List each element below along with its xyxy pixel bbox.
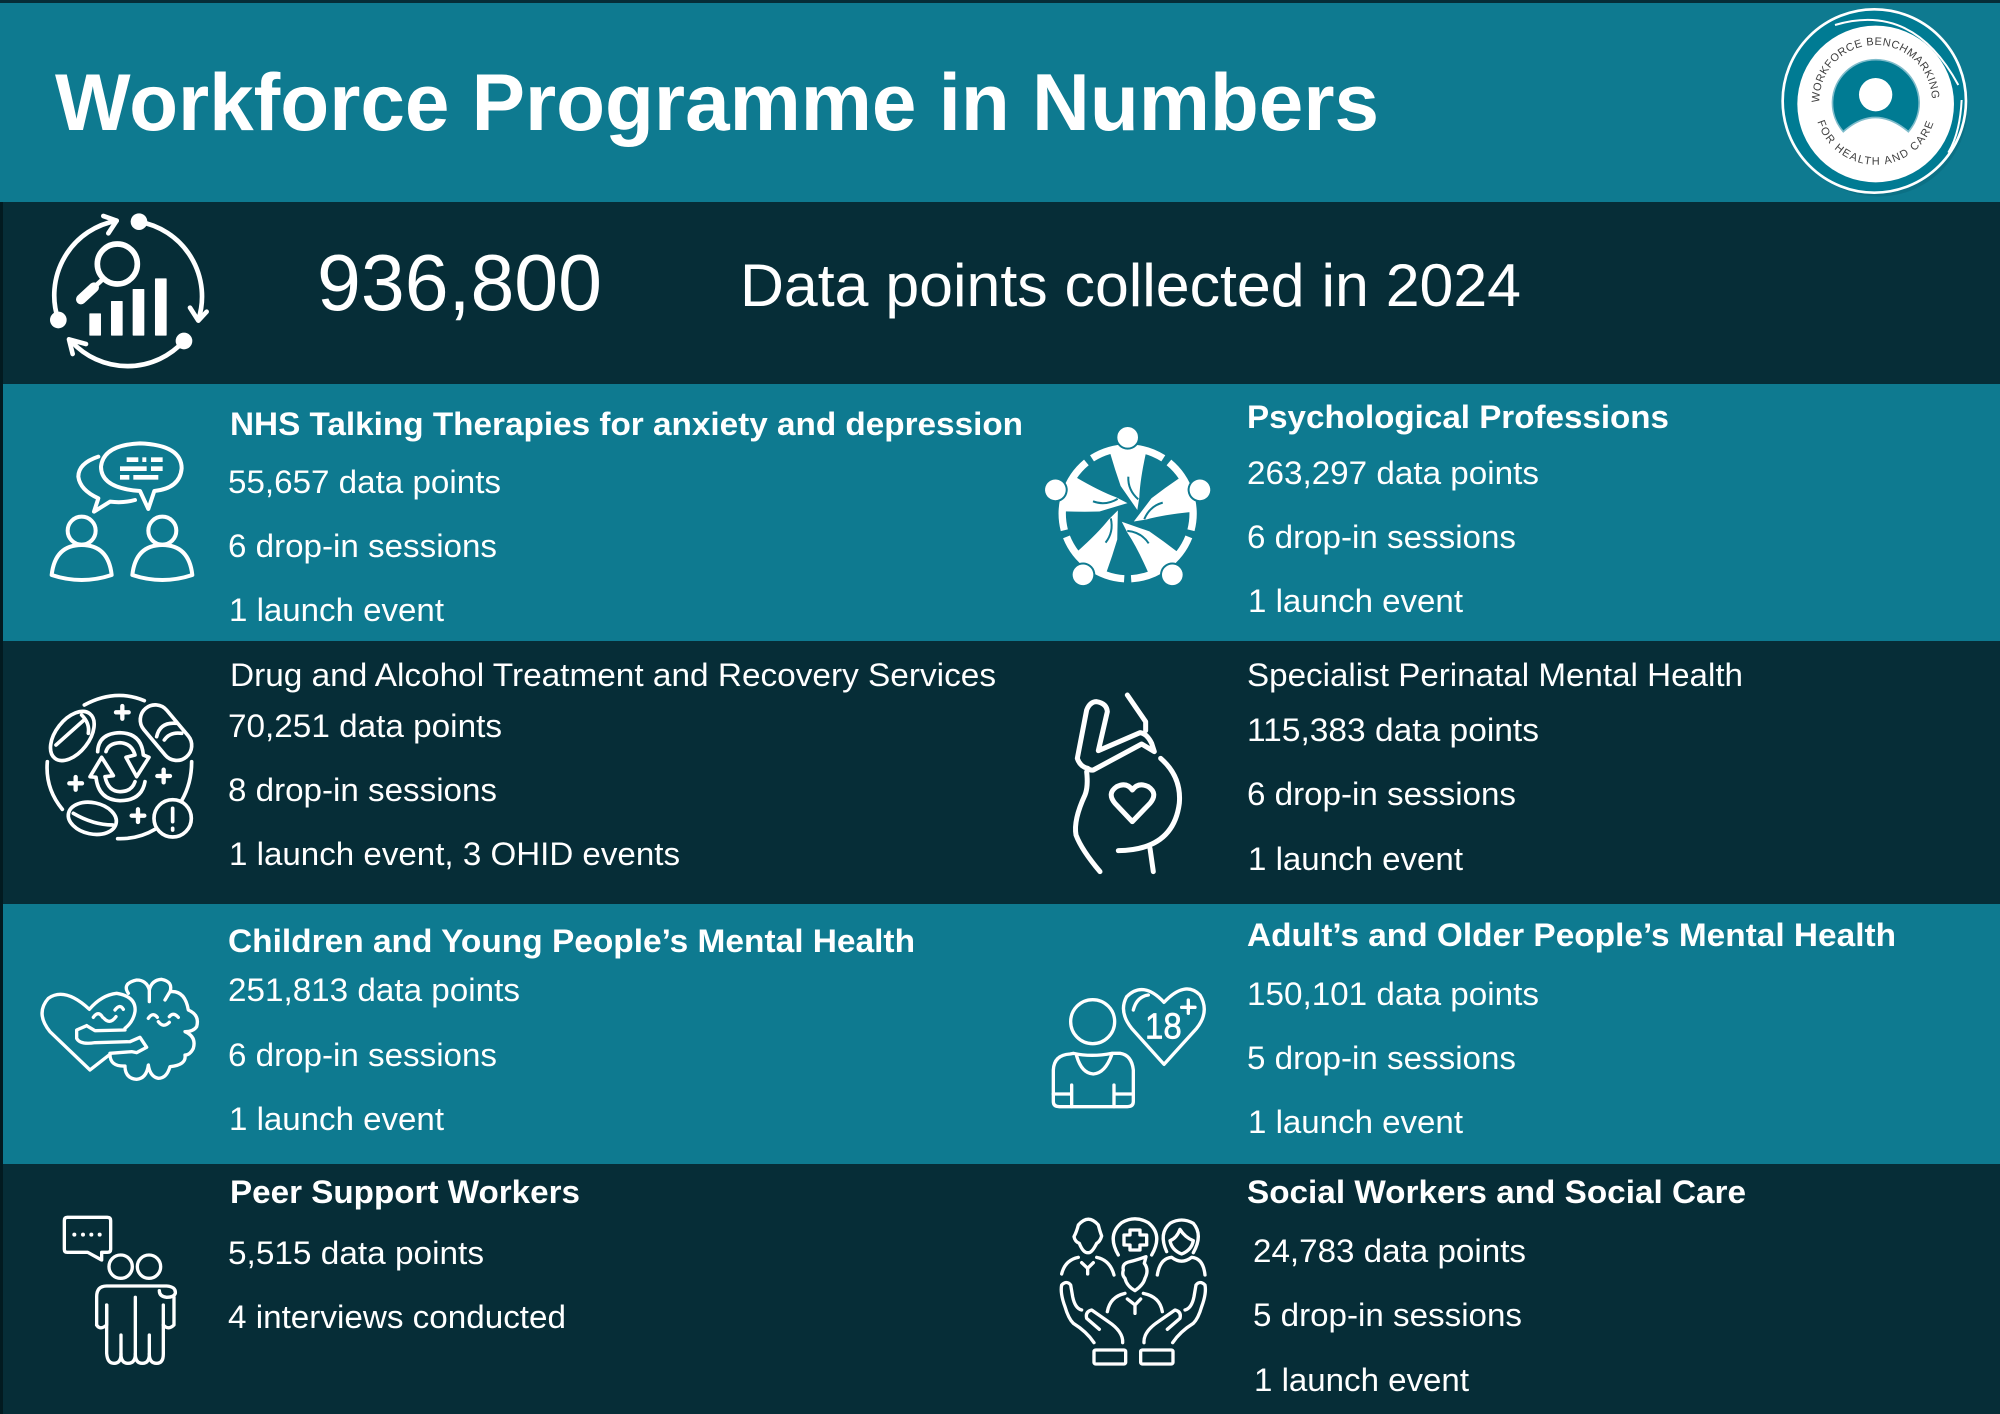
stats list (1247, 455, 1539, 619)
background band: total data points (0, 202, 2000, 384)
panel: Peer Support Workers (64, 1174, 580, 1363)
stats list (228, 708, 680, 872)
panel: Psychological Professions (1034, 399, 1669, 619)
stats list (228, 972, 520, 1137)
stats list: 1 launch event (229, 1101, 444, 1137)
stats list: 5,515 data points (228, 1235, 484, 1271)
logo: Workforce Benchmarking for Health and Care: WORKFORCE BENCHMARKING (1812, 37, 1940, 102)
stats list: 5 drop-in sessions (1253, 1297, 1522, 1333)
stats list: 1 launch event (1248, 583, 1463, 619)
stats list: 115,383 data points (1247, 712, 1539, 748)
stats list (228, 1235, 566, 1335)
background band: row 1 (0, 384, 2000, 641)
stats list: 24,783 data points (1253, 1233, 1526, 1269)
stats list: 1 launch event (1254, 1362, 1469, 1398)
stats list (228, 464, 501, 628)
background band: header (0, 0, 2000, 202)
big number: 936,800 (317, 238, 602, 327)
panel: total data points (50, 213, 1521, 366)
stats list: 1 launch event (1248, 1104, 1463, 1140)
background band: row 3 (0, 904, 2000, 1164)
stats list: 6 drop-in sessions (1247, 519, 1516, 555)
stats list: 5 drop-in sessions (1247, 1040, 1516, 1076)
icon: adult with 18+ heart (1053, 989, 1204, 1107)
stats list: 70,251 data points (228, 708, 502, 744)
title: Workforce Programme in Numbers (55, 58, 1379, 148)
panel: Specialist Perinatal Mental Health (1076, 657, 1743, 877)
icon: adult with 18+ heart: 18 (1145, 1005, 1182, 1046)
heading: Children and Young People’s Mental Health (228, 923, 915, 959)
icon: care team in hands (1061, 1219, 1205, 1364)
stats list (1247, 712, 1539, 877)
stats list: 1 launch event, 3 OHID events (229, 836, 680, 872)
stats list: 6 drop-in sessions (228, 1037, 497, 1073)
heading: Social Workers and Social Care (1247, 1174, 1746, 1210)
panel: Children and Young People's Mental Health (42, 923, 915, 1137)
background band: row 4 (0, 1164, 2000, 1414)
icon: five people in a circle (1034, 426, 1222, 605)
stat label: Data points collected in 2024 (740, 252, 1521, 319)
heading: Peer Support Workers (230, 1174, 580, 1210)
stats list (1253, 1233, 1526, 1398)
icon: two people talking (52, 443, 192, 580)
stats list: 55,657 data points (228, 464, 501, 500)
heading: NHS Talking Therapies for anxiety and depression (230, 406, 1023, 442)
heading: Drug and Alcohol Treatment and Recovery Services (230, 657, 996, 693)
stats list: 251,813 data points (228, 972, 520, 1008)
background band: row 2 (0, 641, 2000, 904)
stats list: 8 drop-in sessions (228, 772, 497, 808)
panel: Social Workers and Social Care (1061, 1174, 1746, 1398)
stats list: 150,101 data points (1247, 976, 1539, 1012)
logo: Workforce Benchmarking for Health and Care: FOR HEALTH AND CARE (1818, 120, 1934, 165)
panel: NHS Talking Therapies (52, 406, 1023, 628)
stats list (1247, 976, 1539, 1140)
icon: data analysis cycle (50, 213, 207, 366)
icon: pills and recovery cycle (42, 695, 198, 839)
heading: Psychological Professions (1247, 399, 1669, 435)
stats list: 6 drop-in sessions (1247, 776, 1516, 812)
stats list: 1 launch event (1248, 841, 1463, 877)
icon: two peers with speech bubble (64, 1217, 175, 1363)
stats list: 263,297 data points (1247, 455, 1539, 491)
icon: heart hugging brain (42, 979, 197, 1079)
heading: Specialist Perinatal Mental Health (1247, 657, 1743, 693)
stats list: 6 drop-in sessions (228, 528, 497, 564)
stats list: 4 interviews conducted (228, 1299, 566, 1335)
stats list: 1 launch event (229, 592, 444, 628)
panel: Drug and Alcohol Treatment (42, 657, 996, 872)
panel: Adult's and Older People's Mental Health (1053, 917, 1896, 1140)
icon: pregnant figure with heart (1076, 695, 1180, 872)
logo: Workforce Benchmarking for Health and Care (1781, 8, 1968, 196)
heading: Adult’s and Older People’s Mental Health (1247, 917, 1896, 953)
